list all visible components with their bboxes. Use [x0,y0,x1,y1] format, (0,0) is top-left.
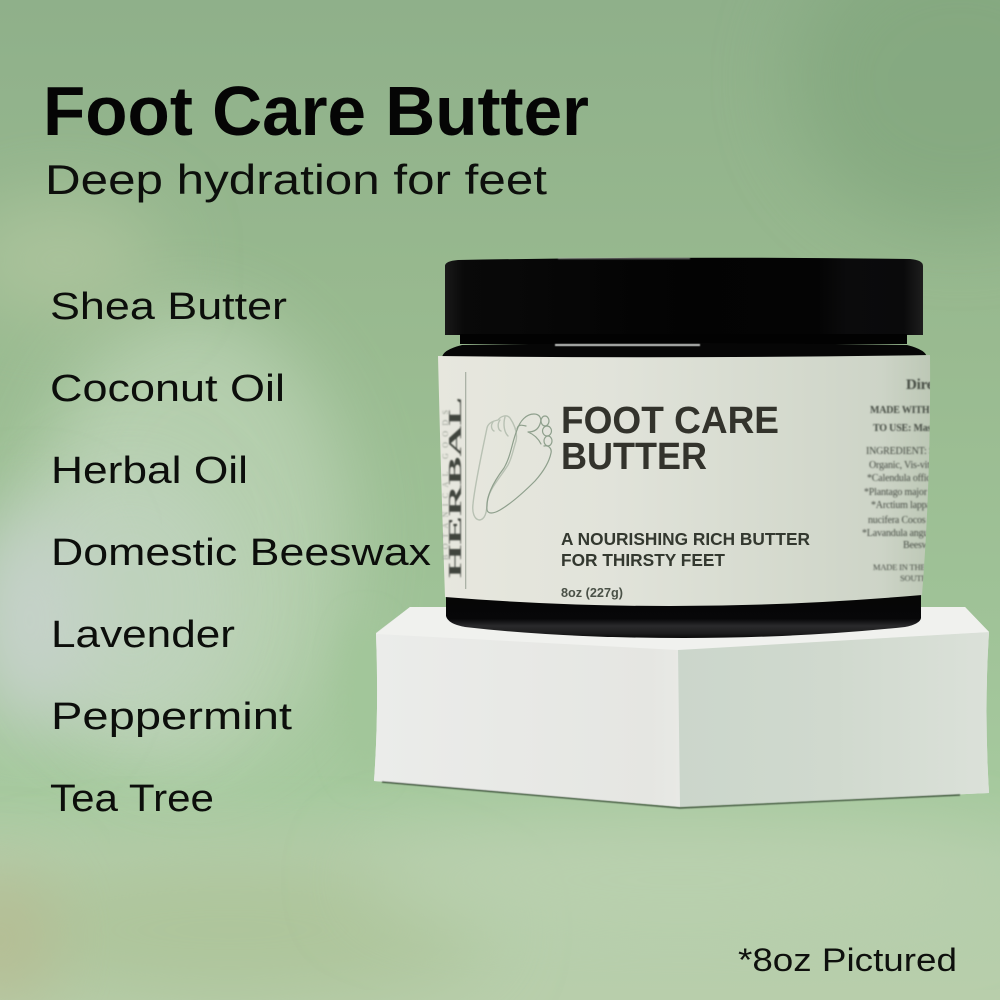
jar neck [460,334,907,344]
label fine print: INGREDIENT: Shea butter, [866,446,974,457]
label subtitle: FOR THIRSTY FEET [561,550,725,570]
white hexagonal plinth [374,607,989,808]
ingredient: peppermint: Peppermint [51,696,293,738]
label title: BUTTER [561,436,707,478]
label size: 8oz (227g) [561,586,623,600]
label fine print [862,378,930,582]
label divider [465,372,466,589]
plinth top face [376,607,989,650]
ingredient: lavender: Lavender [51,614,235,656]
label fine print: Organic, Vis-vitis vinifera [869,460,969,471]
plinth backing [374,607,989,807]
plinth front right face [678,632,989,807]
label fine print: *Lavandula angustifolia oil [862,528,967,539]
product jar [438,258,930,638]
label fine print: *Plantago major flower oil [864,487,967,498]
brand vertical text [441,397,465,578]
label fine print: *Arctium lappa flower [871,500,959,511]
jar lid [445,258,923,335]
ingredient: coconut oil: Coconut Oil [50,368,285,410]
ingredient: tea tree: Tea Tree [50,778,214,820]
title: Foot Care Butter [43,72,589,150]
label fine print: TO USE: Massage into feet [873,423,985,434]
jar label [438,355,930,606]
plinth front left face [374,634,680,807]
ingredient list [50,286,431,820]
label subtitle [561,529,810,570]
brand vertical text: BOTANICAL GOODS [441,410,450,560]
right foot [487,414,552,513]
label fine print: Beeswax oil [903,540,950,551]
lid highlights [555,258,700,345]
ingredient: domestic beeswax: Domestic Beeswax [51,532,431,574]
brand vertical text: HERBAL [445,397,465,578]
plinth contact shadow [382,782,960,808]
subtitle: Deep hydration for feet [45,156,547,203]
label fine print: SOUTH HERBAL [900,573,962,583]
ingredient: herbal oil: Herbal Oil [51,450,248,492]
label fine print: nucifera Cocos oil [868,515,938,526]
footnote: *8oz Pictured [738,942,957,978]
ingredient: shea butter: Shea Butter [50,286,287,328]
left foot [473,416,517,520]
label fine print: *Calendula officinalis oil [867,473,964,484]
jar flange [442,343,927,358]
jar base [446,590,921,638]
icon: feet [473,414,552,520]
label subtitle: A NOURISHING RICH BUTTER [561,529,810,549]
label fine print: MADE IN THE USA BY [873,562,957,572]
label title [561,400,779,478]
label title: FOOT CARE [561,400,779,442]
label fine print: Directions [906,377,970,393]
